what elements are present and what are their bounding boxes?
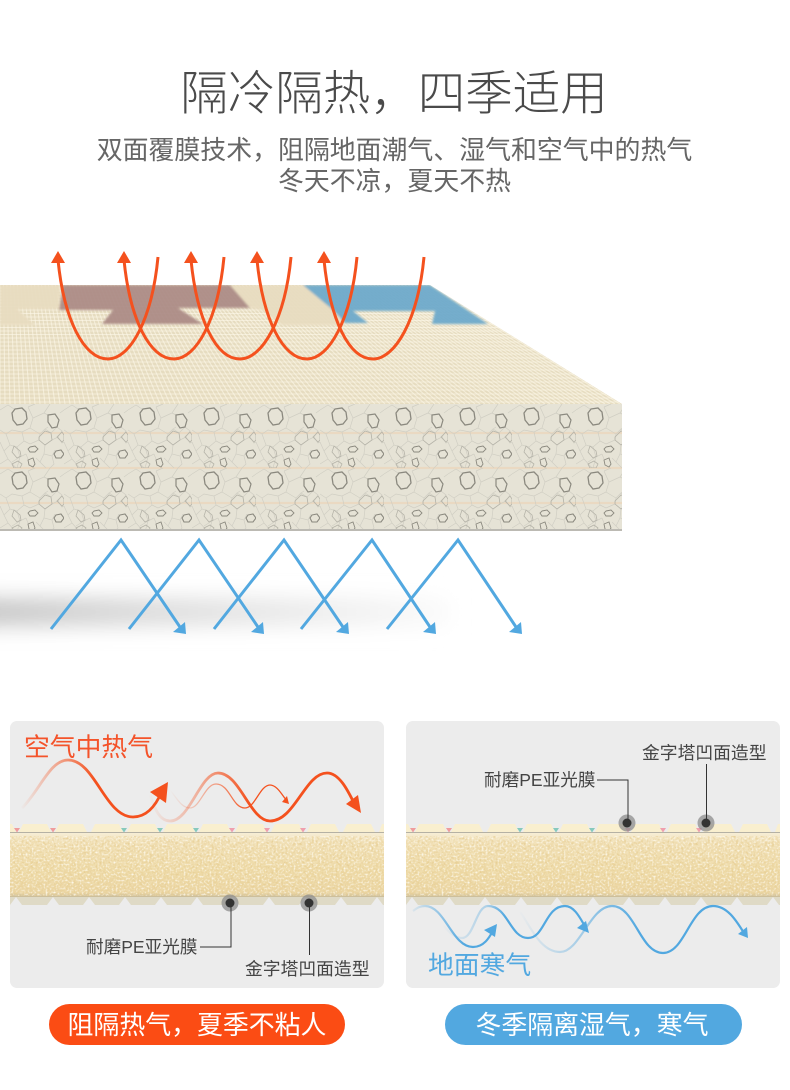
pill: winter benefit: 冬季隔离湿气，寒气 — [475, 1011, 709, 1040]
marker and label: PE film — [484, 770, 636, 832]
subtitle text: 双面覆膜技术，阻隔地面潮气、湿气和空气中的热气 — [97, 136, 692, 165]
subtitle text: 冬天不凉，夏天不热 — [278, 167, 511, 196]
pill: winter benefit — [445, 1004, 742, 1045]
heading: ground cold: 地面寒气 — [428, 951, 531, 980]
floor shadow — [0, 598, 450, 626]
marker and label: pyramid texture — [245, 894, 369, 979]
marker and label: PE film — [86, 894, 238, 957]
heat waves — [22, 760, 361, 821]
marker and label: PE film: 耐磨PE亚光膜 — [484, 770, 595, 790]
pill: summer benefit — [49, 1004, 345, 1045]
panel background — [406, 721, 780, 988]
marker and label: pyramid texture: 金字塔凹面造型 — [245, 959, 369, 979]
panel background — [10, 721, 384, 988]
mat cross-section band — [406, 824, 780, 905]
mat front face with foam cells — [0, 404, 622, 531]
title: 隔冷隔热，四季适用 — [180, 68, 608, 121]
mat top surface — [0, 285, 622, 404]
cold waves — [413, 906, 748, 953]
heading: hot air: 空气中热气 — [24, 733, 153, 762]
marker and label: pyramid texture: 金字塔凹面造型 — [642, 743, 766, 763]
subtitle text — [97, 136, 692, 196]
panel: winter cold cross-section — [406, 721, 780, 988]
cold arrows reflecting under the mat — [51, 540, 522, 634]
heat arrows rising from the mat — [51, 251, 424, 359]
panel: summer heat cross-section — [10, 721, 384, 988]
pill: summer benefit: 阻隔热气，夏季不粘人 — [68, 1011, 326, 1040]
marker and label: pyramid texture — [642, 743, 766, 832]
mat illustration — [0, 285, 622, 531]
marker and label: PE film: 耐磨PE亚光膜 — [86, 937, 197, 957]
mat cross-section band — [10, 824, 384, 905]
